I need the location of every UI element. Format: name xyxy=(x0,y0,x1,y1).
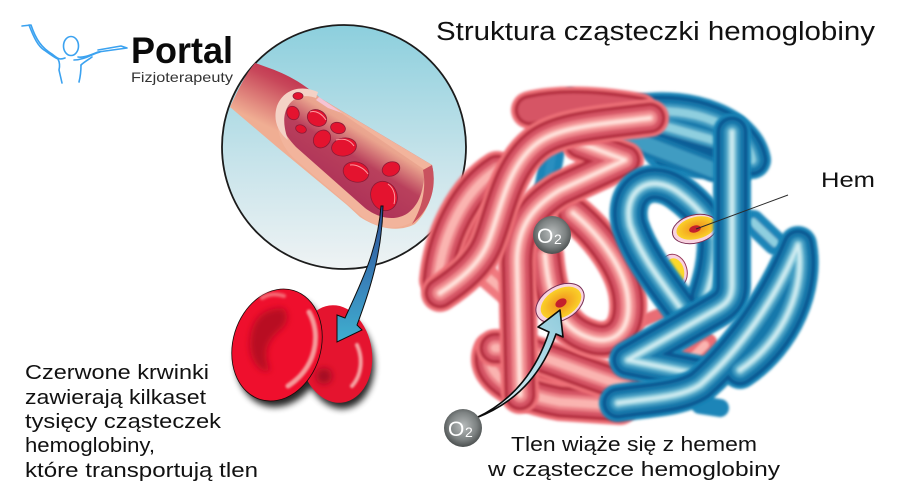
title: Struktura cząsteczki hemoglobiny xyxy=(436,18,875,46)
hemoglobin molecule xyxy=(438,95,800,408)
front red cell xyxy=(218,278,336,412)
heme label line xyxy=(696,195,788,229)
rear red cell xyxy=(294,300,378,408)
oxygen molecule on hemoglobin: O xyxy=(537,225,553,248)
cell shadow xyxy=(222,285,380,419)
icon: figure with raised arms xyxy=(22,25,127,83)
blood vessel xyxy=(230,63,434,229)
text block: oxygen binding caption: Tlen wiąże się z hemem xyxy=(511,433,757,456)
logo: Portal Fizjoterapeuty xyxy=(22,25,233,85)
free oxygen molecule: O xyxy=(448,418,464,441)
red chain: vertical and folded strand xyxy=(517,143,625,395)
free oxygen molecule xyxy=(444,409,482,447)
arrow from vessel to red cell xyxy=(337,206,383,342)
right heme disc xyxy=(669,210,721,248)
hidden heme disc xyxy=(657,251,691,291)
oxygen molecule on hemoglobin: 2 xyxy=(554,231,562,247)
cell highlights xyxy=(310,111,395,204)
large red blood cells xyxy=(218,278,380,419)
magnified blood vessel circle xyxy=(222,25,466,269)
back blue chains xyxy=(482,95,775,368)
text block: oxygen binding caption: w cząsteczce hemoglobiny xyxy=(487,458,781,481)
blue chain: right X strand xyxy=(618,245,800,408)
text block: red cells description: które transportują tlen xyxy=(25,459,258,482)
text block: red cells description: Czerwone krwinki xyxy=(25,361,209,384)
left heme disc xyxy=(529,275,591,331)
text block: red cells description xyxy=(25,361,258,482)
text block: red cells description: tysięcy cząsteczek xyxy=(25,410,222,433)
heme label: Hem xyxy=(821,168,875,192)
oxygen molecule on hemoglobin xyxy=(533,216,571,254)
text block: red cells description: hemoglobiny, xyxy=(25,434,155,457)
blue chain: long vertical strand xyxy=(628,132,732,374)
lens circle xyxy=(222,25,466,269)
text block: red cells description: zawierają kilkaset xyxy=(25,386,206,409)
red chain: top strand xyxy=(440,106,650,293)
red chain: hook xyxy=(545,213,628,340)
logo wordmark: Portal xyxy=(131,30,233,71)
red chain: loose left loop and lower band xyxy=(438,165,625,406)
red cells in vessel xyxy=(284,92,402,215)
blue chain: heart-shaped loop xyxy=(629,184,716,310)
arrow from oxygen to heme xyxy=(476,310,563,418)
logo subtitle: Fizjoterapeuty xyxy=(131,69,233,85)
free oxygen molecule: 2 xyxy=(465,424,473,440)
text block: oxygen binding caption xyxy=(487,433,781,481)
